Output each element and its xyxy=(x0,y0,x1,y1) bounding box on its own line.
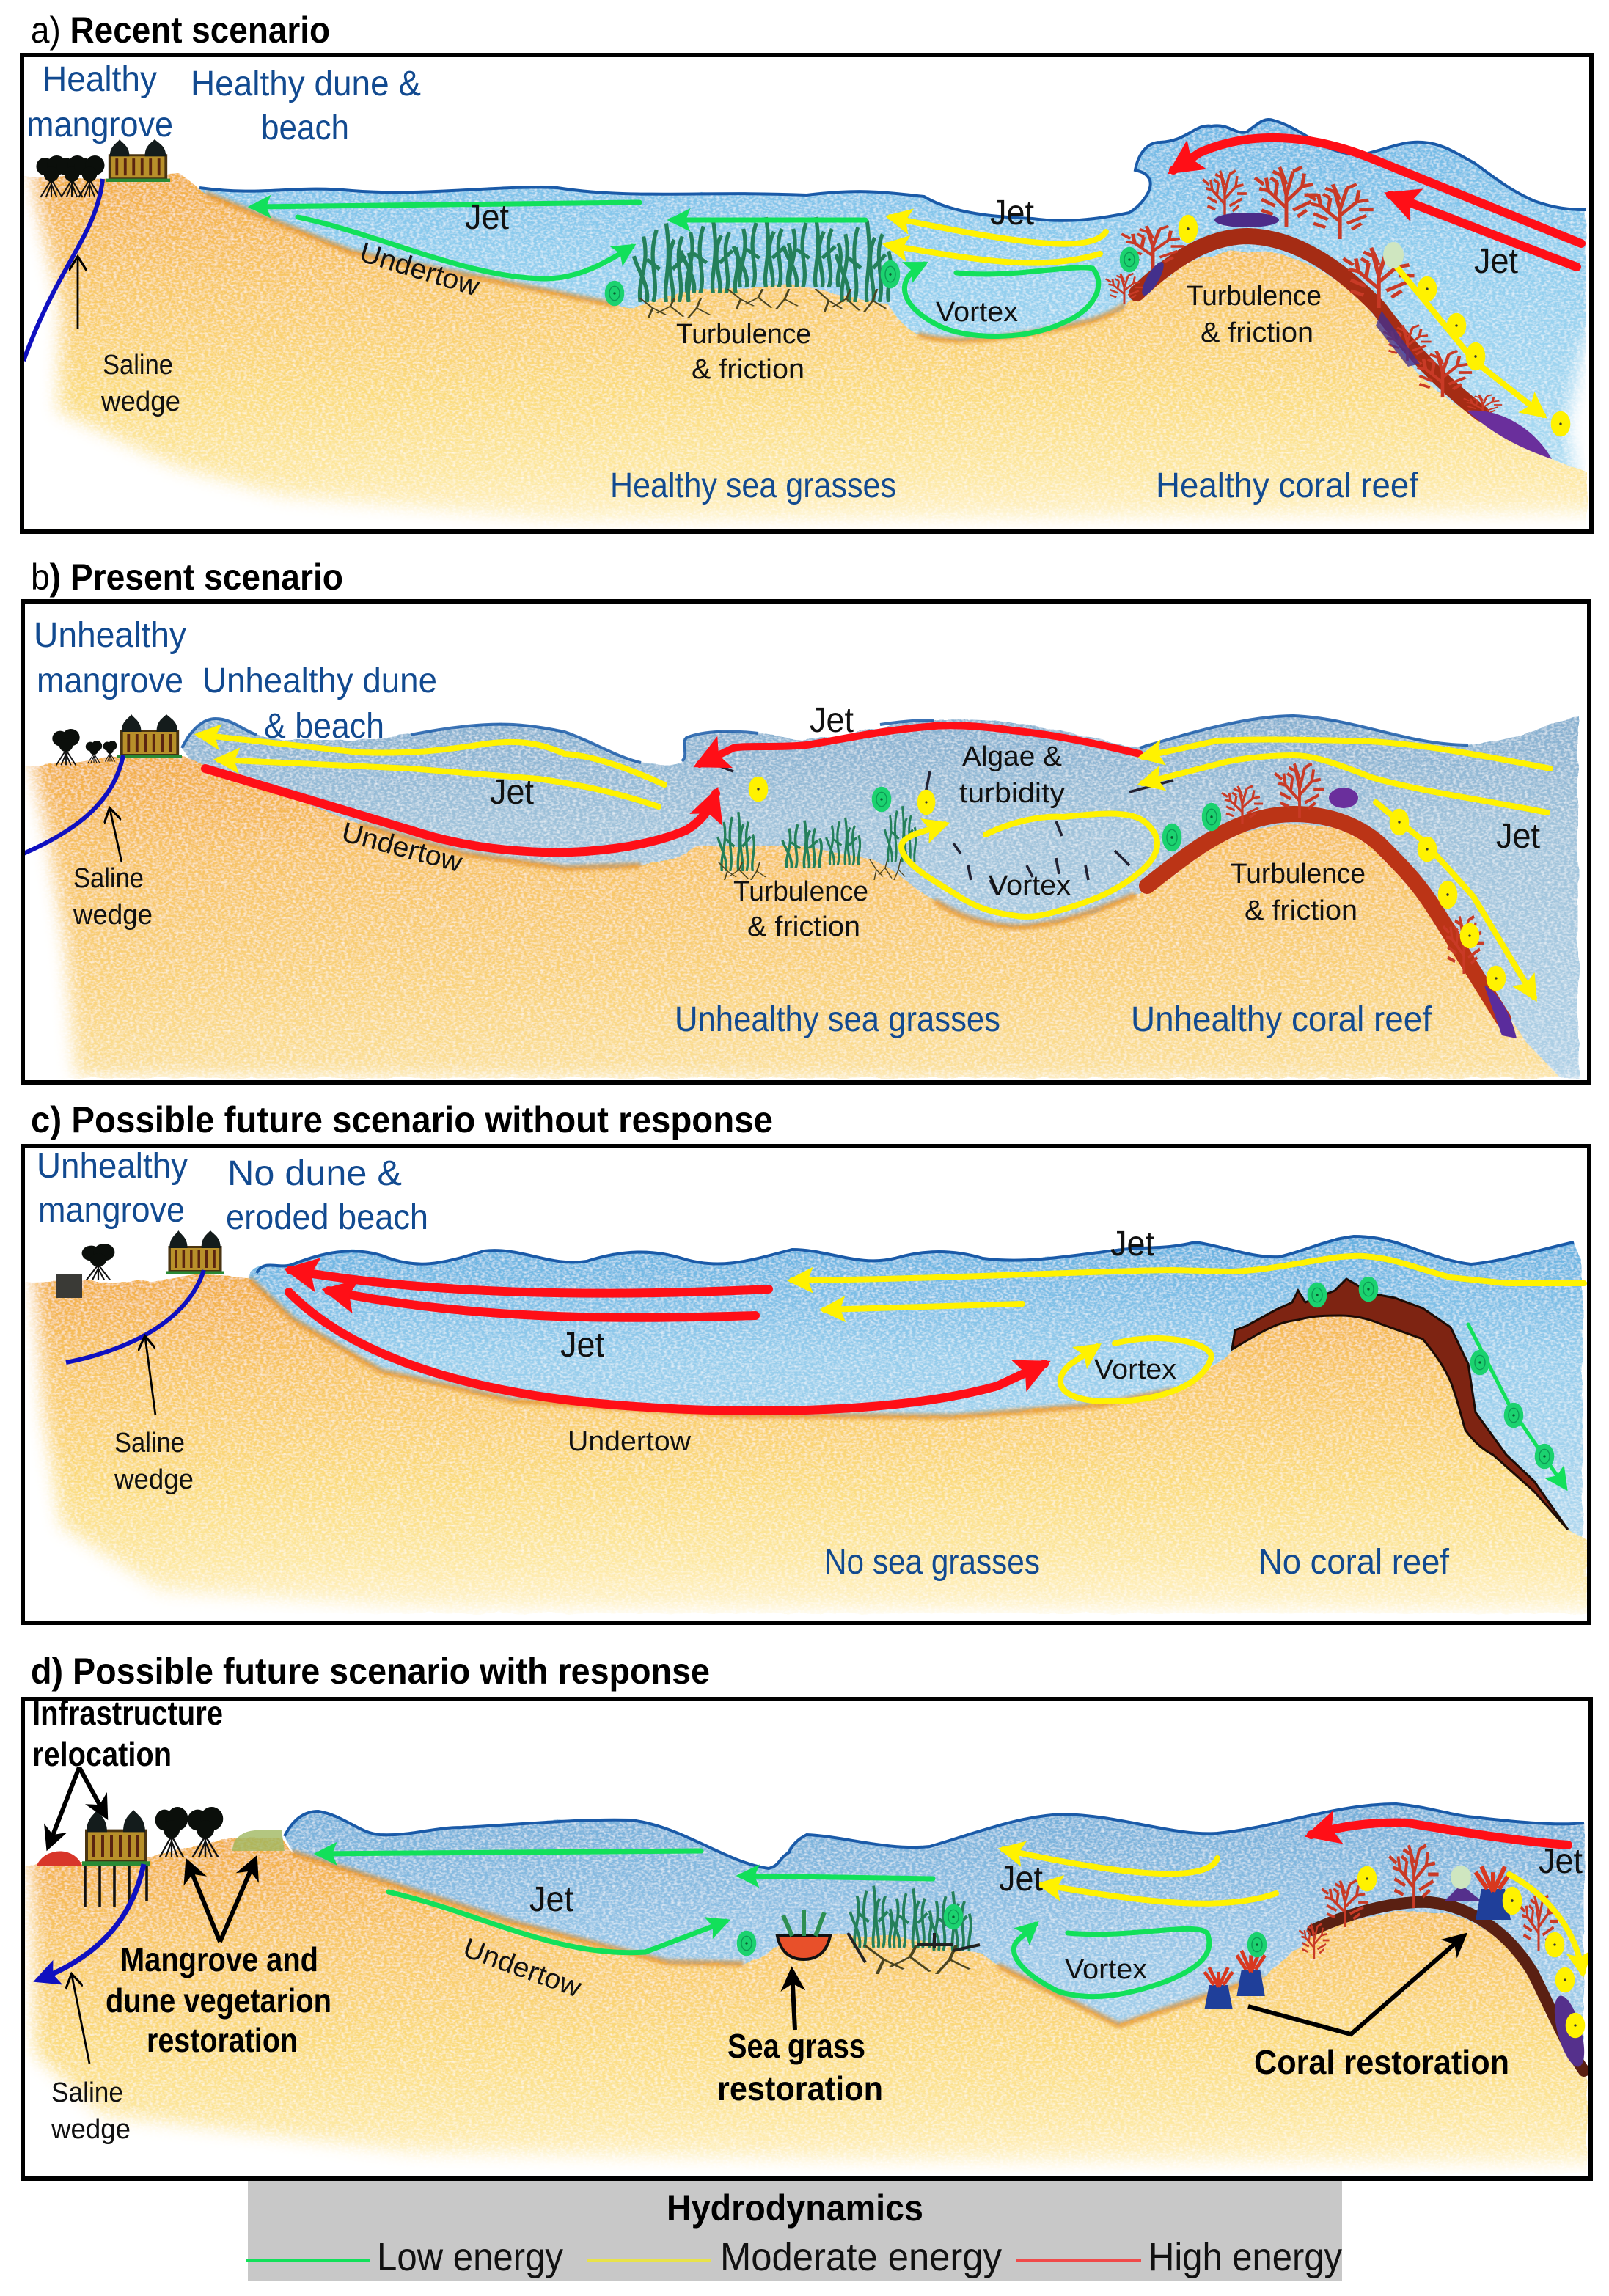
flow arrows c xyxy=(289,1256,1584,1487)
saline arrow a xyxy=(77,258,78,329)
soft fade of sand a xyxy=(0,147,1606,546)
labels a: Vortex xyxy=(936,297,1018,328)
labels a xyxy=(26,60,1518,505)
saline wedge line d xyxy=(38,1864,144,1980)
frame d xyxy=(23,1699,1591,2179)
soft fade of water at the right xyxy=(1566,279,1609,499)
labels b: Saline xyxy=(73,863,144,894)
water c xyxy=(249,1236,1583,1537)
flow markers a xyxy=(605,215,1570,436)
saline wedge line a xyxy=(23,179,103,361)
labels b: Unhealthy dune xyxy=(202,661,437,700)
soft fade of sand b xyxy=(0,741,1599,1097)
labels c: wedge xyxy=(114,1464,194,1495)
soft fade of sand d xyxy=(0,1841,1606,2197)
labels d: Jet xyxy=(1539,1842,1583,1881)
callout arrows d xyxy=(48,1767,1464,2034)
labels d: Jet xyxy=(999,1860,1043,1899)
high energy key: High energy xyxy=(1148,2235,1342,2279)
labels c: Saline xyxy=(114,1428,185,1459)
labels d: Coral restoration xyxy=(1254,2043,1509,2081)
heading a: a) Recent scenario xyxy=(31,10,330,51)
flow arrows a xyxy=(252,138,1581,415)
surface line d xyxy=(285,1804,1584,1868)
labels b: mangrove xyxy=(37,661,183,700)
frame b xyxy=(23,601,1589,1082)
legend background xyxy=(248,2181,1342,2281)
seabed rim d xyxy=(292,1852,1263,2025)
frame c xyxy=(23,1146,1589,1623)
labels c: No dune & xyxy=(227,1154,402,1193)
water a xyxy=(199,120,1586,491)
labels a: Jet xyxy=(1474,242,1518,281)
labels b: Jet xyxy=(810,701,854,740)
dead reef c xyxy=(1232,1279,1568,1530)
labels a: Jet xyxy=(990,194,1034,232)
seagrass a xyxy=(634,217,891,318)
heading b: b) Present scenario xyxy=(31,557,343,598)
labels a: Healthy dune & xyxy=(191,65,421,103)
labels d: restoration xyxy=(147,2021,298,2059)
seagrass b xyxy=(718,806,916,880)
labels d xyxy=(32,1694,1583,2145)
legend title: Hydrodynamics xyxy=(667,2187,923,2229)
labels c: Jet xyxy=(560,1326,604,1365)
labels b: & beach xyxy=(264,707,384,746)
surface line a xyxy=(199,120,1586,221)
labels b: & friction xyxy=(747,912,860,942)
labels c: Unhealthy xyxy=(37,1147,188,1186)
flow markers b xyxy=(749,777,1506,991)
labels a: beach xyxy=(261,109,349,147)
labels c: mangrove xyxy=(38,1191,185,1230)
saline arrow b xyxy=(110,810,122,862)
labels b: Turbulence xyxy=(1231,859,1366,890)
labels a: Saline xyxy=(103,350,173,381)
rubble and building c xyxy=(56,1230,224,1298)
labels a: & friction xyxy=(1201,318,1313,348)
labels d: Mangrove and xyxy=(120,1940,318,1978)
seabed rim c xyxy=(249,1279,1173,1417)
sand profile d xyxy=(23,1838,1587,2174)
labels d: wedge xyxy=(51,2114,131,2145)
heading d: d) Possible future scenario with response xyxy=(31,1651,710,1692)
labels a: & friction xyxy=(692,354,804,385)
flow markers d xyxy=(737,1866,1585,2038)
reef crust a xyxy=(1137,236,1481,414)
soft fade of sand c xyxy=(0,1258,1606,1640)
labels d: Sea grass xyxy=(727,2027,865,2065)
labels b: Turbulence xyxy=(733,876,868,907)
labels b: Unhealthy sea grasses xyxy=(675,1000,1000,1039)
labels a: Jet xyxy=(465,198,509,237)
seabed rim a xyxy=(205,194,1125,340)
surface line c xyxy=(257,1236,1574,1273)
frame a xyxy=(22,55,1591,532)
coral b xyxy=(719,763,1517,1038)
labels d: Vortex xyxy=(1065,1954,1147,1985)
labels b: Jet xyxy=(490,773,534,812)
labels b: turbidity xyxy=(959,778,1065,809)
surface line b xyxy=(182,716,1468,763)
labels c: No sea grasses xyxy=(824,1543,1040,1582)
labels b: Unhealthy coral reef xyxy=(1131,1000,1432,1039)
labels b: Vortex xyxy=(989,870,1071,901)
labels b: Jet xyxy=(1496,817,1540,856)
labels c: Vortex xyxy=(1094,1354,1176,1385)
labels c xyxy=(37,1147,1450,1582)
mangrove and building a xyxy=(36,139,170,197)
saline wedge line c xyxy=(66,1270,204,1362)
labels a: Turbulence xyxy=(1187,281,1322,312)
labels d: restoration xyxy=(717,2069,883,2108)
sand profile c xyxy=(23,1273,1587,1613)
flow arrows d xyxy=(318,1823,1583,1997)
labels c: eroded beach xyxy=(226,1198,428,1237)
panel c: future without response xyxy=(0,1099,1606,1640)
labels d: dune vegetarion xyxy=(106,1981,331,2020)
labels d: Saline xyxy=(51,2077,123,2108)
water b xyxy=(182,716,1578,1078)
labels a: Healthy coral reef xyxy=(1156,466,1419,505)
infrastructure, mangrove and dune vegetation d xyxy=(37,1807,285,1907)
reef crust d xyxy=(1313,1902,1584,2071)
labels b: wedge xyxy=(73,900,153,931)
saline arrow d xyxy=(72,1976,89,2064)
labels d: Jet xyxy=(529,1880,573,1919)
sand profile a xyxy=(23,173,1587,529)
labels c: No coral reef xyxy=(1258,1543,1450,1582)
heading c: c) Possible future scenario without response xyxy=(31,1099,773,1140)
labels c: Undertow xyxy=(568,1426,692,1457)
panel d: future with response xyxy=(0,1651,1606,2197)
labels d: Infrastructure xyxy=(32,1694,223,1732)
labels d: relocation xyxy=(32,1735,172,1773)
mangrove and building b xyxy=(52,714,182,765)
moderate energy key: Moderate energy xyxy=(720,2235,1002,2279)
labels b: Undertow xyxy=(338,817,466,879)
coral and restoration pots d xyxy=(1204,1845,1590,2069)
labels c: Jet xyxy=(1110,1225,1154,1263)
labels a: wedge xyxy=(100,386,180,417)
labels b: Algae & xyxy=(962,741,1062,772)
labels b xyxy=(34,616,1540,1039)
sand profile b xyxy=(23,757,1561,1078)
labels a: mangrove xyxy=(26,106,173,144)
reef crust b xyxy=(1147,814,1503,1019)
water d xyxy=(285,1804,1584,2075)
saline wedge line b xyxy=(23,755,123,854)
labels d: Undertow xyxy=(459,1933,586,2004)
legend: hydrodynamics xyxy=(246,2181,1342,2281)
coral a xyxy=(1106,167,1552,459)
labels a: Healthy xyxy=(43,60,157,99)
saline arrow c xyxy=(145,1338,155,1415)
labels a: Turbulence xyxy=(676,319,811,350)
flow markers c xyxy=(1308,1277,1554,1469)
seagrass restoration d xyxy=(777,1886,980,1974)
panel b: present scenario xyxy=(0,557,1599,1097)
labels b: & friction xyxy=(1245,895,1357,926)
panel a: recent scenario xyxy=(0,10,1609,546)
labels a: Healthy sea grasses xyxy=(610,466,896,505)
seabed rim b xyxy=(359,824,1135,927)
labels a: Undertow xyxy=(356,237,483,303)
flow arrows b xyxy=(199,725,1550,997)
low energy key: Low energy xyxy=(377,2235,563,2279)
labels b: Unhealthy xyxy=(34,616,186,655)
